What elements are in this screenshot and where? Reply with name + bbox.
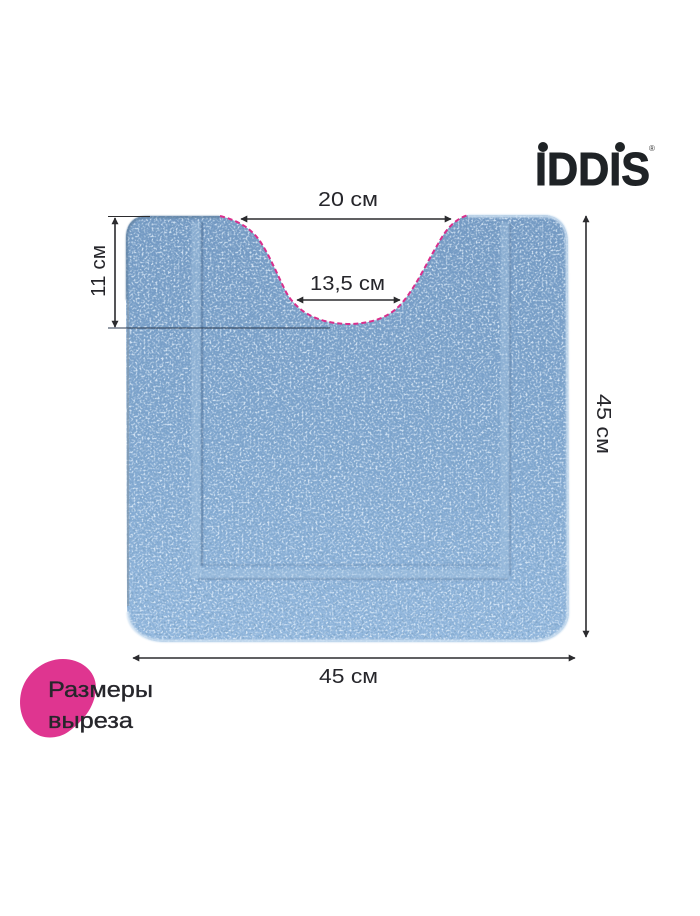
dimension: 20 cm width: 20 см (318, 189, 378, 211)
dimension: 45 cm height: 45 см (592, 394, 614, 454)
dimension: 45 cm width: 45 см (319, 666, 378, 688)
pale rim on the lit sides (128, 216, 568, 641)
caption: cut-out dimensions with magenta blob (20, 659, 153, 738)
dimension: 13.5 cm width: 13,5 см (310, 273, 385, 295)
logo: IDDIS: ® (649, 144, 655, 153)
dimension: 13.5 cm width (297, 273, 400, 300)
logo: IDDIS: IDDIS (535, 143, 650, 195)
dimension: 11 cm height: 11 см (88, 245, 110, 297)
cut-out outline: dashed magenta edge (220, 215, 468, 324)
caption: cut-out dimensions with magenta blob: Размеры (48, 677, 153, 702)
photo: blue bath mat (126, 215, 569, 642)
darker shaded edge at the top left (127, 217, 220, 300)
caption: cut-out dimensions with magenta blob: выреза (48, 708, 134, 733)
woven border channel (196, 222, 510, 579)
